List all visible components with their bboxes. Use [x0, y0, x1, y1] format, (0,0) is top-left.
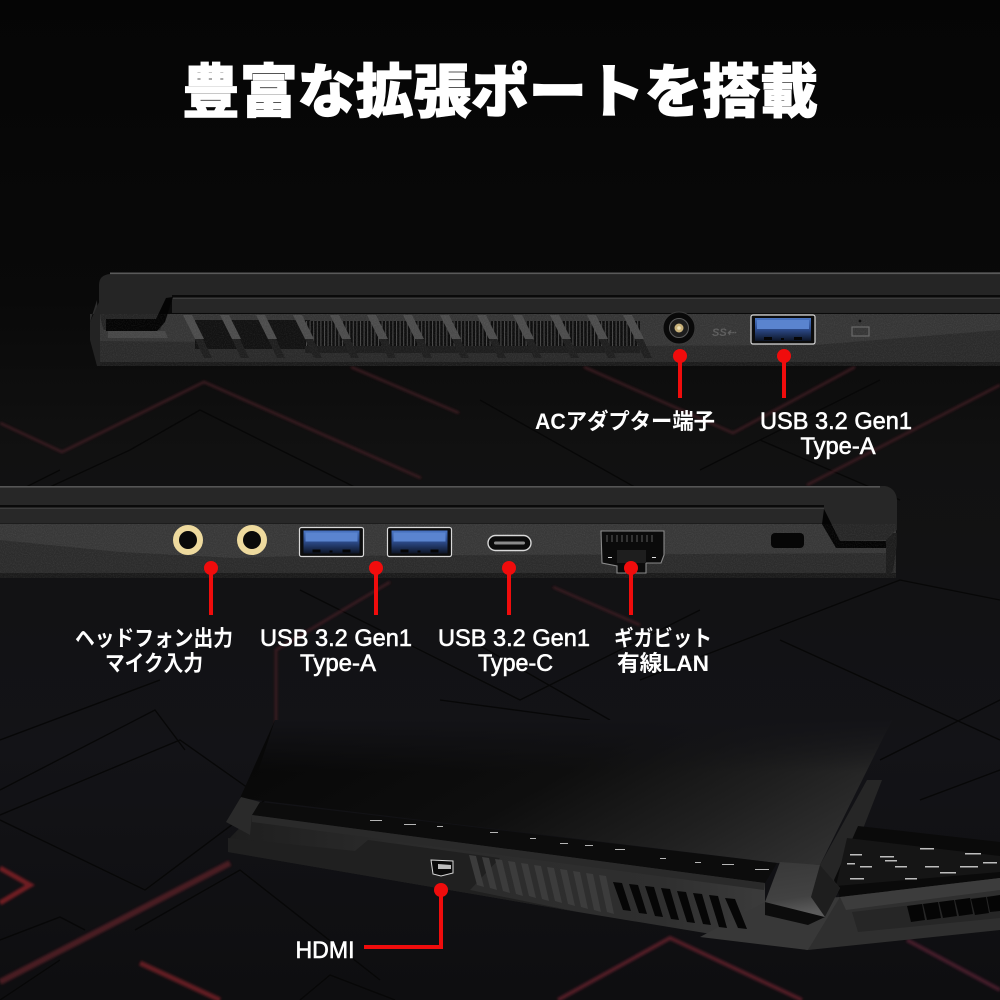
left hinge: [226, 797, 260, 835]
rear strip: [252, 802, 777, 883]
label: top USB Type-A: [760, 408, 912, 460]
icon: battery indicator: [852, 320, 869, 336]
icon: HDMI port: [431, 860, 453, 876]
icon: SS USB mark: SS⇠: [712, 327, 737, 339]
label: USB Type-C: USB 3.2 Gen1: [438, 625, 590, 652]
label: USB Type-A: [260, 625, 412, 677]
label: AC adapter port: ACアダプター端子: [535, 409, 715, 434]
icon: security lock slot: [771, 533, 804, 548]
label: gigabit LAN: [614, 626, 712, 676]
label: HDMI: HDMI: [296, 937, 354, 964]
label: top USB Type-A: USB 3.2 Gen1: [760, 408, 912, 435]
rear body: [228, 815, 808, 950]
icon: USB Type-A port 1: [300, 528, 364, 556]
label: USB Type-C: Type-C: [478, 650, 553, 677]
label: USB Type-A: USB 3.2 Gen1: [260, 625, 412, 652]
side vents: [469, 855, 614, 914]
callout: AC adapter: [673, 349, 687, 398]
label: USB Type-C: [438, 625, 590, 677]
icon: AC adapter port: [663, 312, 695, 344]
icon: headphone jack: [176, 528, 200, 552]
callout: HDMI elbow: [364, 883, 448, 947]
callout: top USB: [777, 349, 791, 398]
icon: USB Type-C port: [488, 536, 531, 550]
title: 豊富な拡張ポートを搭載: [182, 60, 818, 125]
label: gigabit LAN: 有線LAN: [617, 651, 709, 676]
callout: USB Type-C: [502, 561, 516, 615]
top laptop side view: [90, 272, 1000, 366]
icon: microphone jack: [240, 528, 264, 552]
middle laptop side view: [0, 486, 897, 578]
callout: audio jacks: [204, 561, 218, 615]
label: top USB Type-A: Type-A: [800, 433, 876, 460]
label: headphone and mic: ヘッドフォン出力: [75, 626, 233, 651]
laptop lid: [240, 720, 892, 888]
label: gigabit LAN: ギガビット: [614, 626, 712, 651]
icon: LAN port: [601, 531, 664, 573]
label: USB Type-A: Type-A: [300, 650, 376, 677]
label: headphone and mic: マイク入力: [105, 651, 203, 676]
bottom laptop rear view: [226, 720, 1000, 950]
label: headphone and mic: [75, 626, 233, 676]
keyboard deck: [808, 826, 1000, 950]
icon: top USB Type-A port: [751, 315, 815, 344]
callout: LAN: [624, 561, 638, 615]
right hinge: [765, 862, 840, 925]
callout: USB Type-A: [369, 561, 383, 615]
icon: USB Type-A port 2: [388, 528, 452, 556]
